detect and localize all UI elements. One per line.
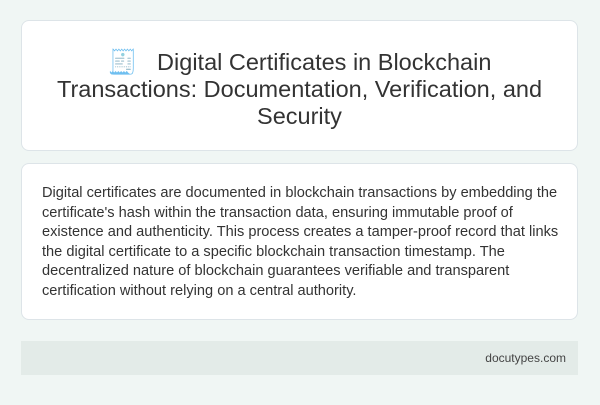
description text panel: certificate's hash within the transaction data, ensuring immutable proof of [42,205,513,221]
description text panel: certification without relying on a central authority. [42,283,356,299]
title panel: 🧾 Digital Certificates in Blockchain [108,49,491,76]
description text panel: decentralized nature of blockchain guarantees verifiable and transparent [42,263,509,279]
description text panel: Digital certificates are documented in blockchain transactions by embedding the [42,185,557,201]
title panel: Transactions: Documentation, Verification, and [57,76,542,102]
description text panel [21,163,578,320]
footer [21,341,578,375]
title panel [21,20,578,151]
description text panel: existence and authenticity. This process creates a tamper-proof record that links [42,224,558,240]
description text panel: the digital certificate to a specific blockchain transaction timestamp. The [42,244,505,260]
footer: docutypes.com [485,351,566,365]
title panel: Security [257,103,342,129]
